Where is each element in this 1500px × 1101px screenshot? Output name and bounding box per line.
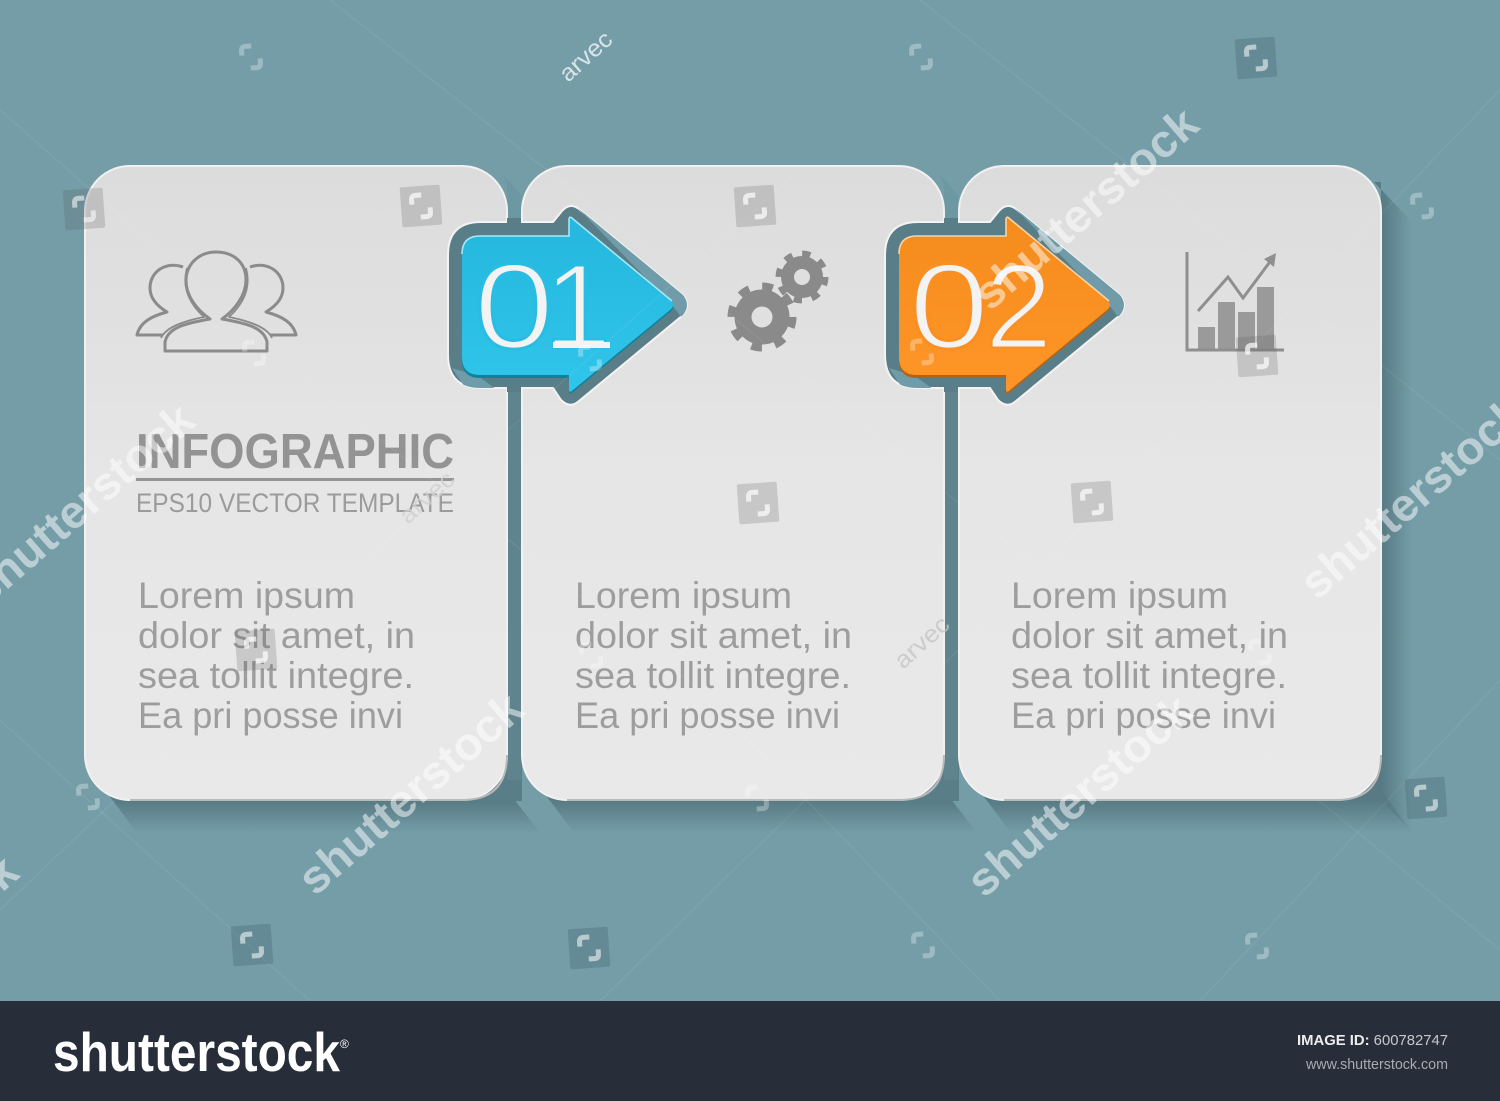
panel: right card <box>959 166 1381 800</box>
text block: middle card: dolor sit amet, in <box>575 615 852 656</box>
footer bar <box>0 1001 1500 1101</box>
watermark: arvec text <box>394 26 955 674</box>
image id: IMAGE ID: 600782747 <box>1297 1032 1448 1049</box>
website: www.shutterstock.com <box>1305 1056 1448 1073</box>
footer logo: shutterstock <box>53 1021 340 1083</box>
text block: left card: dolor sit amet, in <box>138 615 415 656</box>
icon: people <box>137 252 296 351</box>
text block: middle card <box>575 575 852 736</box>
arrow cutout 1 <box>448 200 695 405</box>
watermark: arvec text: arvec <box>394 466 460 529</box>
text block: right card: Ea pri posse invi <box>1011 695 1276 736</box>
watermark: shutterstock text: shutterstock <box>956 683 1202 907</box>
card bottom edges <box>130 755 1381 800</box>
text block: left card: sea tollit integre. <box>138 655 414 696</box>
heading rule <box>136 478 454 481</box>
subheading: EPS10 VECTOR TEMPLATE <box>136 488 454 518</box>
text block: left card: Ea pri posse invi <box>138 695 403 736</box>
watermark: arvec text: arvec <box>554 26 618 87</box>
text block: right card: dolor sit amet, in <box>1011 615 1288 656</box>
panel: left card <box>85 166 507 800</box>
heading: INFOGRAPHIC: INFOGRAPHIC <box>136 425 454 479</box>
watermark: arvec text: arvec <box>889 611 955 674</box>
arrow: step 02 <box>899 217 1110 394</box>
stems closing the gaps at the cutouts <box>507 218 958 392</box>
number 01: 0 <box>474 238 554 374</box>
text block: middle card: Lorem ipsum <box>575 575 792 616</box>
watermark: shutterstock text: shutterstock <box>287 681 533 905</box>
icon: gears <box>732 254 824 347</box>
number 02: 0 <box>909 238 989 374</box>
text block: left card: Lorem ipsum <box>138 575 355 616</box>
number 01 <box>474 238 611 374</box>
panel: middle card <box>522 166 944 800</box>
text block: left card <box>138 575 415 736</box>
watermark: bare logo marks <box>78 45 1432 958</box>
arrow cutout 2 <box>885 200 1132 405</box>
watermark: shutterstock text: shutterstock <box>962 96 1208 320</box>
watermark: shutterstock text <box>0 96 1500 907</box>
text block: middle card: Ea pri posse invi <box>575 695 840 736</box>
icon: bar chart with rising arrow <box>1187 252 1284 350</box>
text block: right card: Lorem ipsum <box>1011 575 1228 616</box>
text block: middle card: sea tollit integre. <box>575 655 851 696</box>
number 02 <box>909 238 1052 374</box>
card long shadows <box>105 175 1412 833</box>
text block: right card <box>1011 575 1288 736</box>
text block: right card: sea tollit integre. <box>1011 655 1287 696</box>
registered mark: ® <box>340 1037 349 1051</box>
arrow: step 01 <box>462 217 673 394</box>
watermark: logo tiles <box>63 37 1447 969</box>
number 01: 1 <box>544 238 611 374</box>
number 02: 2 <box>985 238 1052 374</box>
